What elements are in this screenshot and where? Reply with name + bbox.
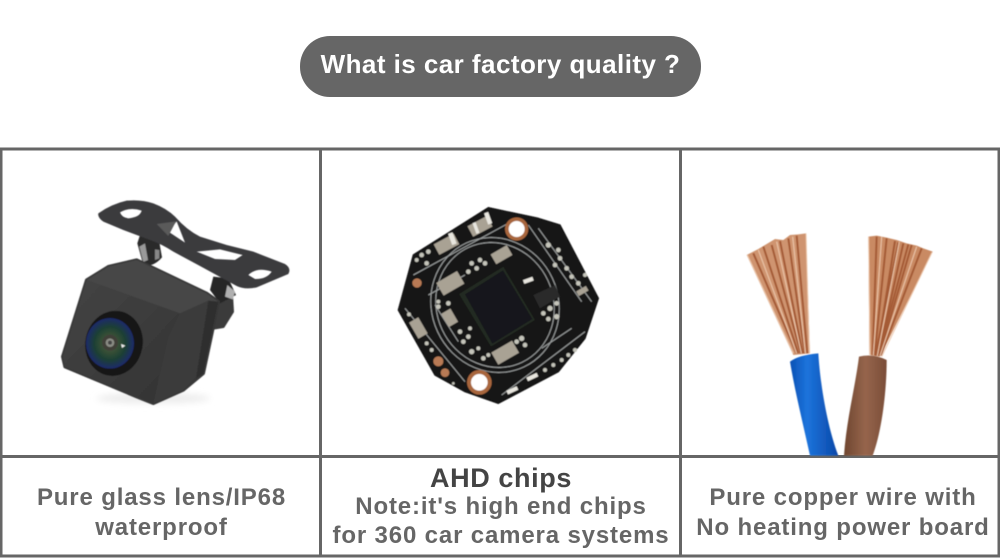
title: What is car factory quality ? — [321, 49, 680, 79]
traces — [405, 216, 592, 395]
caption: AHD chips — [332, 463, 669, 549]
lens — [79, 305, 149, 381]
caption: camera — [37, 484, 286, 541]
caption: copper wire: No heating power board — [696, 514, 990, 541]
caption: copper wire — [696, 484, 990, 541]
brown wire — [844, 356, 887, 456]
caption: camera: waterproof — [95, 514, 228, 541]
title — [300, 36, 701, 97]
caption: camera: Pure glass lens/IP68 — [37, 484, 286, 511]
table grid — [0, 149, 1000, 556]
icon: car camera — [63, 200, 289, 404]
body — [63, 260, 218, 403]
icon: AHD chip board — [398, 208, 598, 403]
sensor — [459, 267, 535, 347]
components — [409, 216, 589, 365]
caption: copper wire: Pure copper wire with — [709, 484, 977, 511]
caption: AHD chips: for 360 car camera systems — [332, 522, 669, 549]
caption: AHD chips: AHD chips — [430, 463, 572, 493]
bracket — [98, 200, 289, 288]
icon: copper wires — [747, 233, 933, 456]
caption: AHD chips: Note:it's high end chips — [355, 493, 647, 520]
copper strands — [747, 233, 810, 355]
rear mount — [213, 295, 233, 328]
blue wire — [790, 353, 838, 456]
copper pads — [412, 278, 422, 288]
